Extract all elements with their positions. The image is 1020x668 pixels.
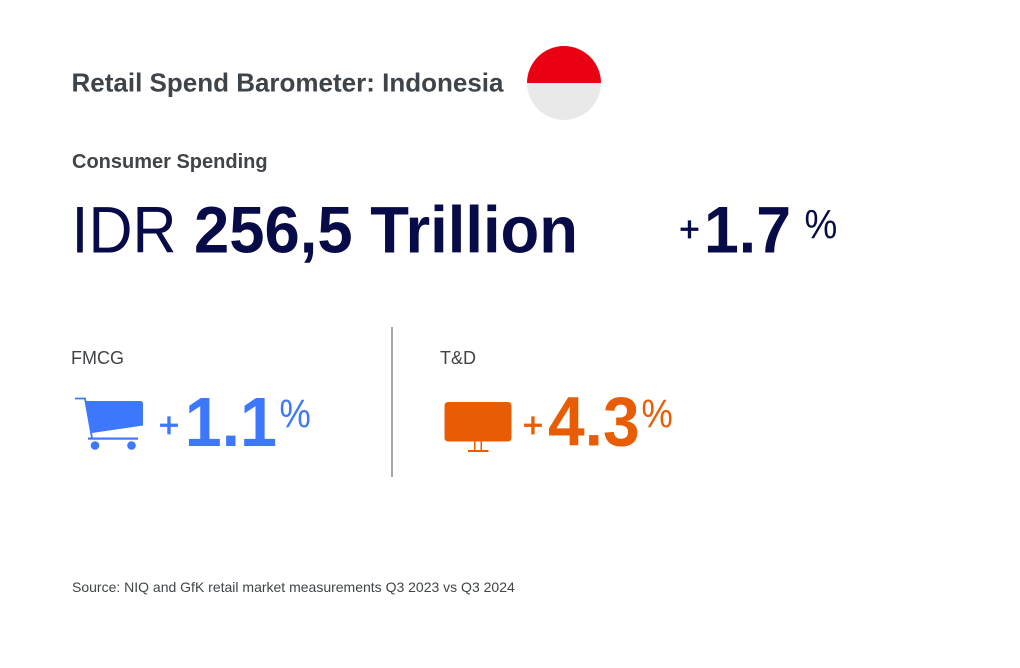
icon: monitor <box>444 402 512 452</box>
change value: % <box>280 392 311 436</box>
change value: 1.1 <box>185 383 277 461</box>
change value <box>159 383 311 461</box>
change value: + <box>523 406 543 445</box>
title: Retail Spend Barometer: Indonesia <box>72 68 504 98</box>
headline change: % <box>804 202 837 248</box>
panel: FMCG <box>71 348 311 461</box>
change value <box>523 382 673 460</box>
source note: Source: NIQ and GfK retail market measurements Q3 2023 vs Q3 2024 <box>72 579 515 595</box>
subheading: consumer spending: Consumer Spending <box>72 151 268 173</box>
change value: % <box>642 392 673 436</box>
panel: T&D <box>440 348 673 460</box>
headline change: + <box>679 210 700 249</box>
icon: shopping cart <box>75 398 143 450</box>
label: T&D: T&D <box>440 348 476 368</box>
headline value: IDR <box>72 194 176 266</box>
change value: + <box>159 406 179 445</box>
headline change: 1.7 <box>704 194 791 266</box>
icon: Indonesia flag <box>527 46 601 120</box>
label: FMCG: FMCG <box>71 348 124 368</box>
headline change <box>679 194 837 266</box>
divider <box>391 327 393 477</box>
headline value: 256,5 Trillion <box>194 194 578 266</box>
change value: 4.3 <box>548 382 640 460</box>
